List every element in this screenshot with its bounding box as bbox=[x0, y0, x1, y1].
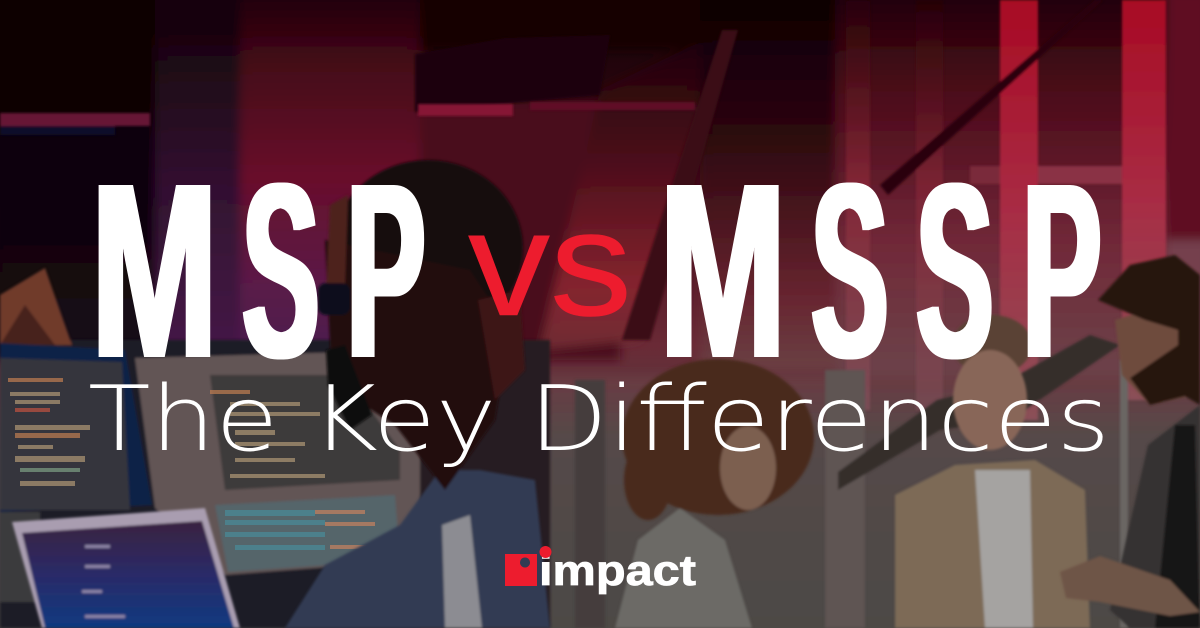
heading: MSP: S bbox=[242, 132, 319, 411]
heading: MSSP: M bbox=[659, 131, 786, 410]
man: hair and head bbox=[333, 160, 523, 336]
heading: MSP: M bbox=[91, 131, 218, 410]
vertical columns bbox=[846, 0, 870, 410]
laptop bbox=[12, 508, 240, 628]
heading: MSP: P bbox=[347, 132, 425, 411]
bearded man bbox=[1060, 255, 1200, 628]
heading: MSSP bbox=[659, 131, 1101, 411]
right monitor bbox=[135, 350, 420, 575]
lower office wall bbox=[540, 375, 1200, 628]
left monitor bbox=[0, 343, 152, 512]
man: glasses bbox=[318, 283, 350, 315]
dark lower left bbox=[0, 340, 545, 628]
blonde woman bbox=[895, 315, 1090, 628]
dark ledge box bbox=[415, 35, 610, 112]
logo mark: red square bbox=[505, 554, 537, 586]
code lines bbox=[8, 378, 375, 550]
heading: vs: vs bbox=[468, 179, 632, 347]
logo wordmark: impact bbox=[539, 547, 696, 595]
orange blurry object bbox=[0, 268, 72, 345]
curly-haired woman bbox=[615, 359, 814, 628]
logo dot bbox=[540, 546, 552, 558]
heading: MSSP: P bbox=[1023, 132, 1101, 411]
diagonal dark band bbox=[622, 30, 738, 340]
red ledge bars bbox=[0, 113, 150, 126]
logo: impact bbox=[505, 546, 696, 595]
heading: MSP bbox=[91, 131, 425, 411]
heading: MSSP: S bbox=[916, 132, 993, 411]
diagonal stair rail bbox=[880, 0, 1103, 195]
man: shirt bbox=[285, 470, 550, 628]
heading: MSSP: S bbox=[811, 132, 888, 411]
subheading: The Key Differences bbox=[88, 367, 1110, 472]
man at monitors bbox=[285, 160, 550, 628]
